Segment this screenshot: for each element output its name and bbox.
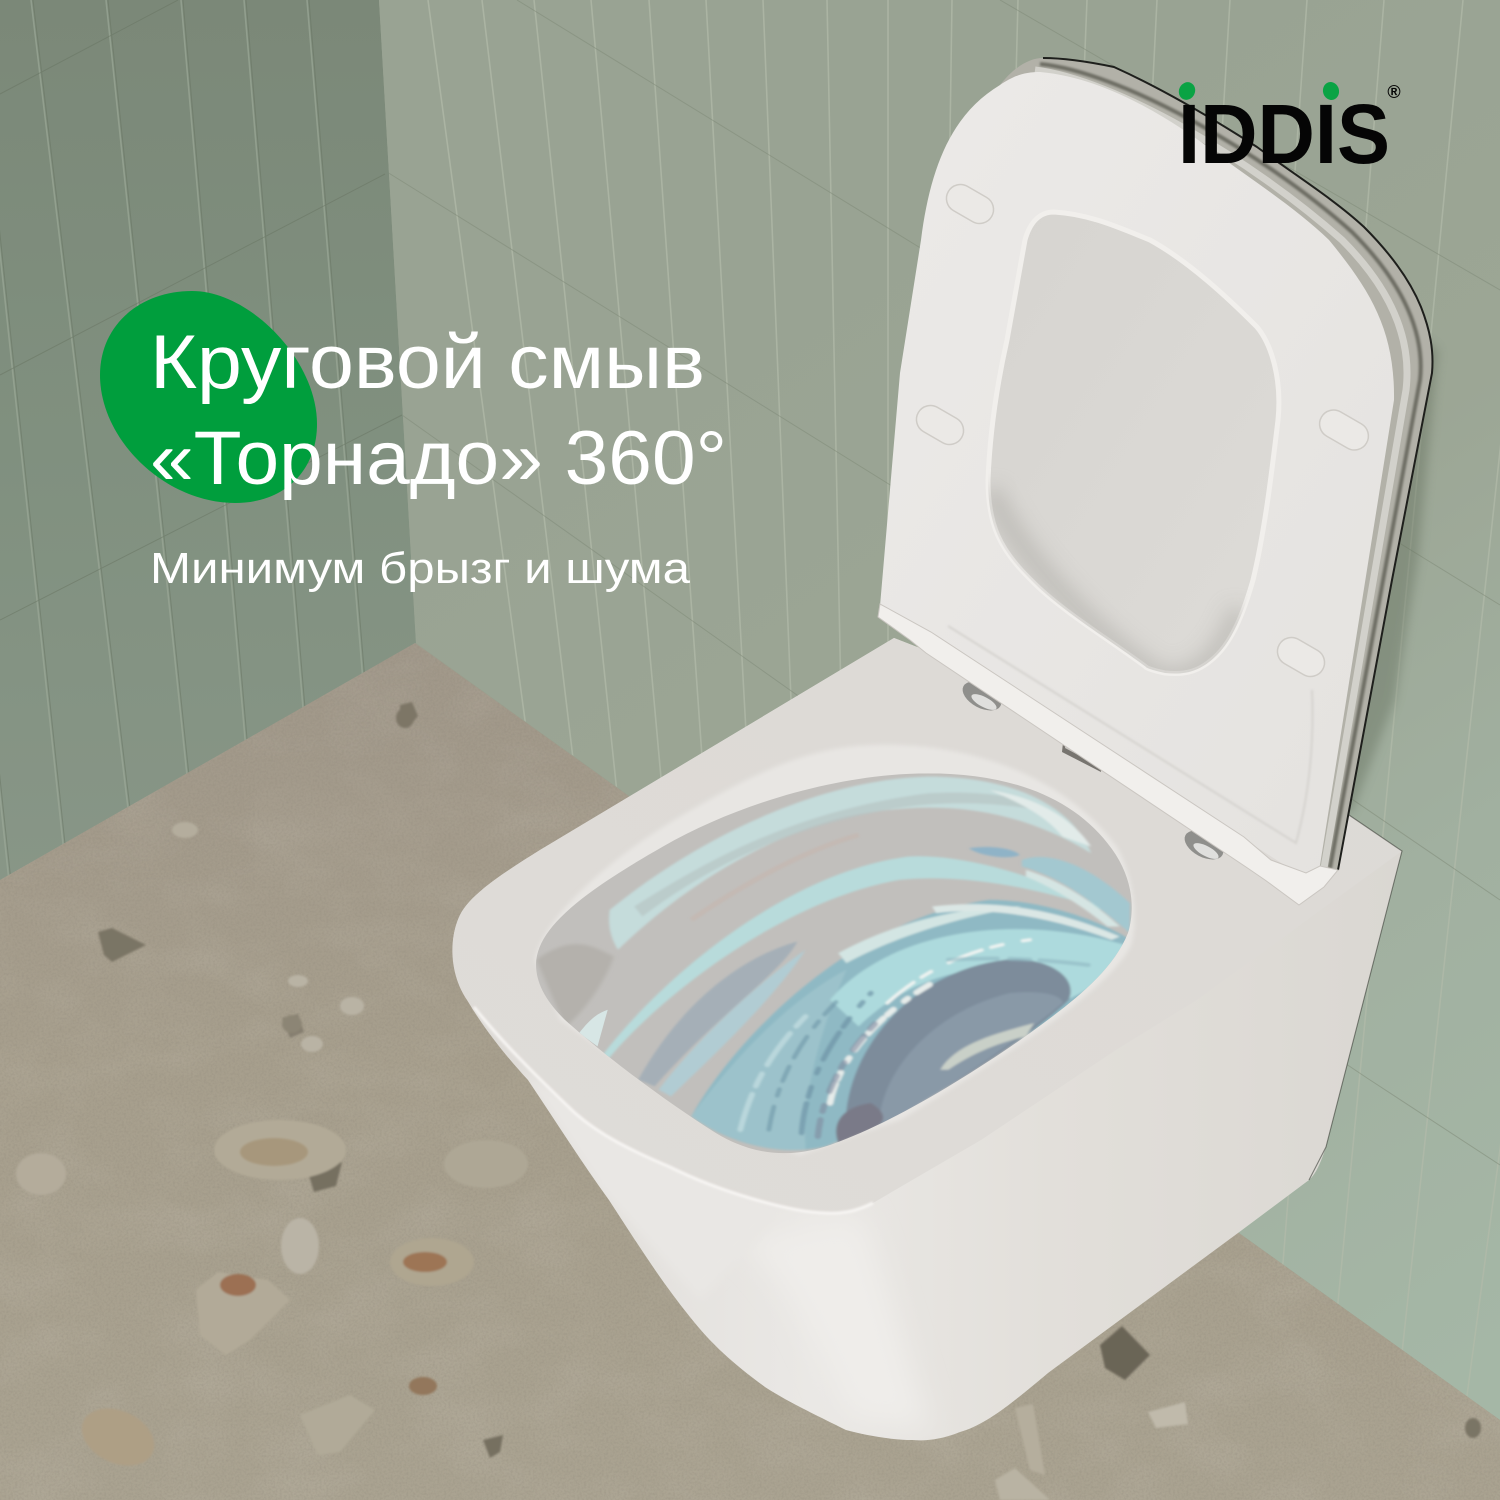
chrome hinge right	[1180, 825, 1228, 865]
bowl outer shade	[536, 944, 614, 1026]
subheading: Минимум брызг и шума	[150, 544, 691, 593]
background: right wall	[370, 0, 1500, 1500]
lid groove	[1040, 64, 1421, 868]
upper aqua band	[609, 777, 1091, 950]
lid recess	[988, 212, 1279, 679]
logo: IDDIS: IDDIS	[1178, 87, 1390, 181]
middle aqua band	[602, 856, 1120, 1060]
water swirl	[536, 774, 1132, 1153]
top-right blue marks	[969, 847, 1020, 857]
green blob	[100, 291, 317, 503]
chrome hinge left	[958, 676, 1006, 716]
lower left grey-blue streak	[638, 941, 797, 1086]
logo green dot right	[1321, 80, 1341, 102]
background: stone floor	[0, 640, 1500, 1500]
heading: «Торнадо» 360°	[150, 416, 727, 501]
bowl sloped rim	[535, 745, 1134, 1155]
logo green dot left	[1176, 79, 1198, 103]
toilet bowl body	[440, 630, 1420, 1460]
lid back rim	[1000, 58, 1433, 880]
toilet	[440, 58, 1433, 1460]
background: left wall	[0, 0, 430, 900]
shadow of the lid on the wall	[1338, 340, 1438, 812]
chrome release button	[1062, 733, 1101, 772]
lid inner face	[880, 72, 1394, 878]
bowl glaze left	[579, 1010, 608, 1046]
heading: Круговой смыв	[150, 320, 705, 405]
main swirl	[691, 900, 1130, 1150]
turquoise patch	[830, 929, 1130, 1026]
wall corner line	[1309, 815, 1402, 1180]
registered mark: ®	[1387, 82, 1401, 102]
rim front edge highlight	[474, 1007, 873, 1213]
seat hinge bar	[878, 604, 1338, 905]
rim top surface	[453, 638, 1402, 1213]
dark vortex centre	[846, 958, 1072, 1112]
foam and streaks	[740, 940, 1099, 1136]
lid light band	[1035, 70, 1407, 868]
lid inner ridge	[948, 626, 1313, 843]
heading	[150, 320, 727, 501]
lid bumpers	[911, 179, 1374, 682]
lid outer black edge	[1043, 58, 1433, 870]
floor terrazzo stones	[16, 702, 1481, 1500]
